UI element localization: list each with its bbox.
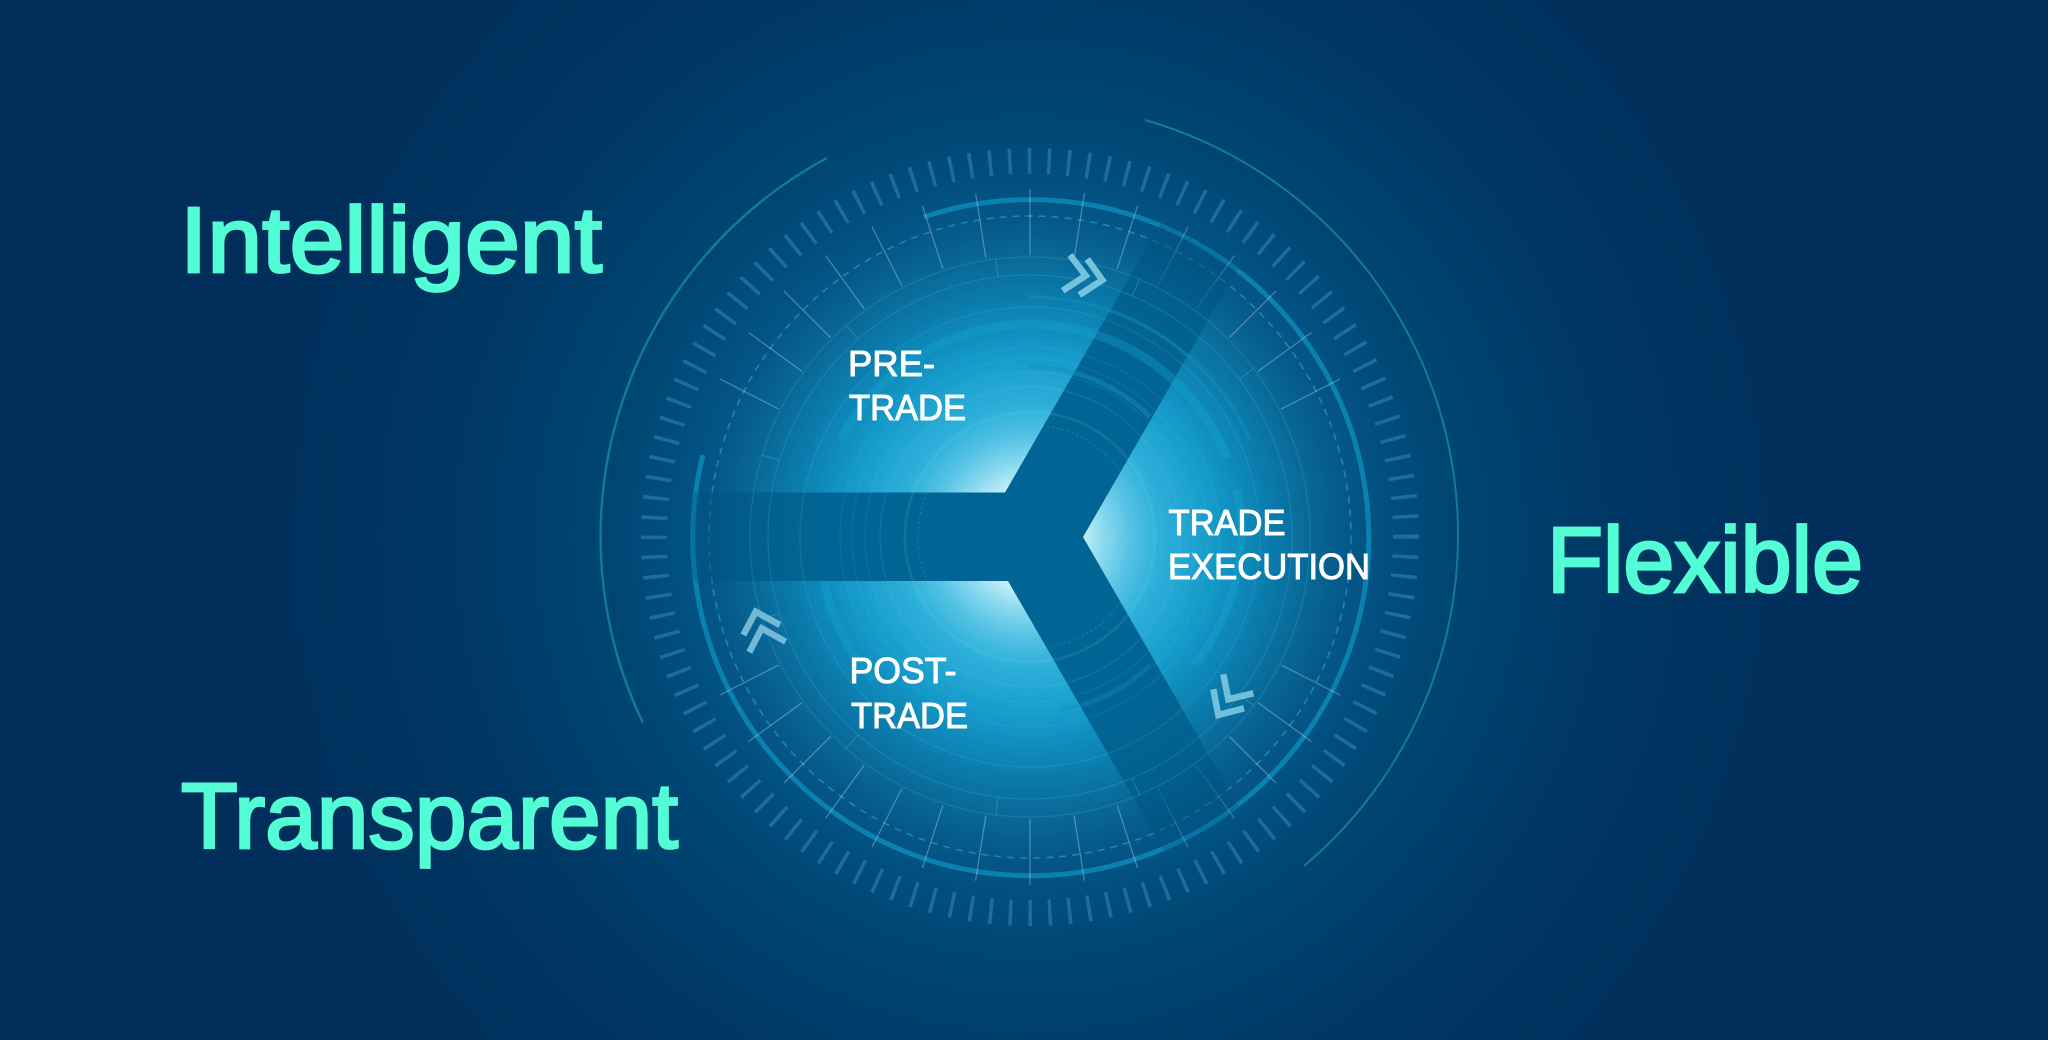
heading: Flexible: Flexible (1547, 508, 1863, 612)
thick glow arc lower right (1194, 490, 1241, 665)
label: trade execution (1168, 502, 1370, 587)
arc segment r170 (1030, 367, 1150, 417)
tick ring (654, 161, 1406, 913)
chevrons: lower right (1213, 674, 1253, 715)
label: post-trade (850, 650, 968, 736)
label: post-trade: TRADE (851, 695, 968, 736)
thick glow arc lower left (824, 582, 873, 680)
target dial (601, 120, 1458, 913)
label: pre-trade: PRE- (848, 343, 935, 384)
dashed ring (709, 216, 1351, 858)
radial lines (720, 189, 1340, 885)
Y-shaped divider (600, 146, 1283, 927)
thick ring (693, 200, 1369, 876)
outer arc left (601, 158, 827, 723)
label: pre-trade (848, 343, 966, 428)
chevrons: lower left (743, 612, 786, 652)
label: trade execution: EXECUTION (1168, 546, 1370, 587)
label: pre-trade: TRADE (849, 387, 966, 428)
arc segment r240 (1027, 297, 1250, 440)
arc segment r180 lower (1060, 665, 1150, 710)
heading: Intelligent: Intelligent (180, 188, 602, 292)
label: post-trade: POST- (850, 650, 956, 691)
thick glow arc upper (841, 324, 1227, 458)
outer arc right (1145, 120, 1458, 866)
central radial glow (610, 117, 1450, 957)
heading: Transparent: Transparent (181, 764, 678, 868)
inner concentric rings (750, 257, 1310, 817)
label: trade execution: TRADE (1168, 502, 1286, 543)
chevrons: top (1063, 255, 1102, 295)
ring notches (762, 259, 1254, 815)
